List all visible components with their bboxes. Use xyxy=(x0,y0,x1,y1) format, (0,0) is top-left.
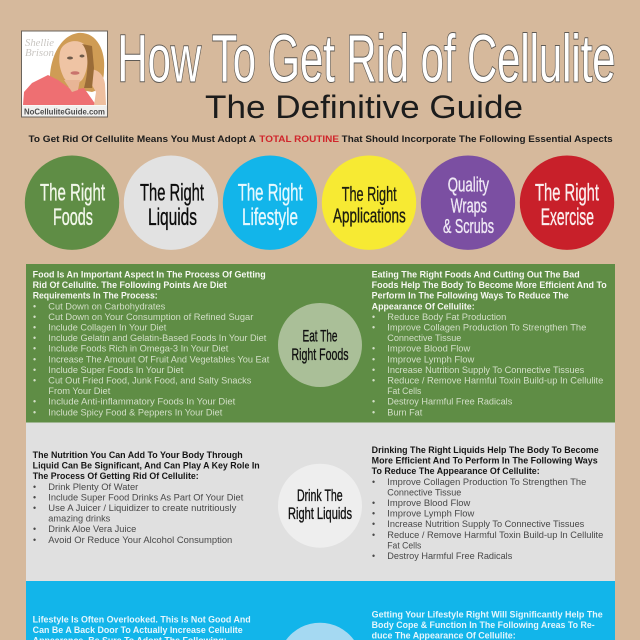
panel: the right lifestyle xyxy=(26,581,615,640)
left text: diet requirements: • xyxy=(33,365,36,375)
right text: food benefits: Connective Tissue xyxy=(387,333,461,343)
left text: diet requirements: Rid Of Cellulite. The Following Points Are Diet xyxy=(33,280,227,290)
badge: eat the right foods xyxy=(278,303,362,387)
circle: the right exercise: The Right xyxy=(535,180,599,207)
right text: liquid benefits: • xyxy=(372,519,375,529)
right text: liquid benefits: • xyxy=(372,477,375,487)
left text: liquid nutrition: The Nutrition You Can Add To Your Body Through xyxy=(33,450,243,460)
right text: food benefits: Eating The Right Foods And Cutting Out The Bad xyxy=(372,270,580,280)
circle: the right foods: The Right xyxy=(40,180,105,207)
left text: diet requirements: • xyxy=(33,407,36,417)
signature: Brison xyxy=(25,47,54,59)
right text: food benefits: Improve Lymph Flow xyxy=(387,354,475,364)
circle: the right lifestyle: Lifestyle xyxy=(242,204,298,231)
left text: diet requirements: Requirements In The Process: xyxy=(33,291,158,301)
badge: eat the right foods: Right Foods xyxy=(292,346,348,364)
right text: food benefits: • xyxy=(372,312,375,322)
left text: liquid nutrition: • xyxy=(33,524,36,534)
left text: diet requirements: Increase The Amount Of Fruit And Vegetables You Eat xyxy=(48,354,270,364)
signature xyxy=(25,37,54,59)
left text: diet requirements: Food Is An Important Aspect In The Process Of Getting xyxy=(33,270,266,280)
right text: food benefits: Fat Cells xyxy=(387,386,422,396)
left text: diet requirements: Include Foods Rich in Omega-3 In Your Diet xyxy=(48,344,229,354)
right text: liquid benefits: Destroy Harmful Free Radicals xyxy=(387,551,513,561)
badge: lifestyle circle xyxy=(286,623,354,640)
right text: food benefits: Improve Blood Flow xyxy=(387,344,471,354)
right text: liquid benefits: Connective Tissue xyxy=(387,487,461,497)
right text: liquid benefits: More Efficient And To Perform In The Following Ways xyxy=(372,456,598,466)
circle: the right applications: Applications xyxy=(333,205,406,228)
left text: liquid nutrition: The Process Of Getting Rid Of Cellulite: xyxy=(33,471,199,481)
circle: the right liquids: Liquids xyxy=(148,204,197,231)
left text: diet requirements: Cut Down on Your Consumption of Refined Sugar xyxy=(48,312,253,322)
right text: food benefits: Perform In The Following Ways To Reduce The xyxy=(372,291,569,301)
left text: diet requirements: • xyxy=(33,322,36,332)
left text: diet requirements: Cut Out Fried Food, Junk Food, and Salty Snacks xyxy=(48,376,252,386)
right text: liquid benefits: Improve Collagen Production To Strengthen The xyxy=(387,477,586,487)
left text: diet requirements: From Your Diet xyxy=(48,386,111,396)
right text: lifestyle benefits: Getting Your Lifestyle Right Will Significantly Help The xyxy=(372,609,603,619)
right text: liquid benefits: • xyxy=(372,498,375,508)
left text: diet requirements: Include Spicy Food & Peppers In Your Diet xyxy=(48,407,223,417)
right text: liquid benefits: • xyxy=(372,530,375,540)
left text: diet requirements: • xyxy=(33,333,36,343)
right text: food benefits: • xyxy=(372,407,375,417)
circle: the right foods xyxy=(25,156,119,250)
circle: the right liquids xyxy=(124,156,218,250)
right text: food benefits: Reduce Body Fat Production xyxy=(387,312,506,322)
intro sentence xyxy=(28,134,613,145)
right text: liquid benefits: Fat Cells xyxy=(387,540,422,550)
site name: NoCelluliteGuide.com xyxy=(24,106,105,116)
intro sentence: TOTAL ROUTINE xyxy=(259,134,340,145)
left text: liquid nutrition xyxy=(33,450,260,545)
right text: liquid benefits: Improve Lymph Flow xyxy=(387,509,475,519)
circle: the right lifestyle xyxy=(223,156,317,250)
left text: diet requirements: Include Super Foods In Your Diet xyxy=(48,365,184,375)
photo: author portrait with site name xyxy=(22,31,108,117)
right text: liquid benefits: • xyxy=(372,551,375,561)
right text: food benefits: Appearance Of Cellulite: xyxy=(372,301,475,311)
right text: liquid benefits: Drinking The Right Liquids Help The Body To Become xyxy=(372,445,599,455)
right text: food benefits: • xyxy=(372,344,375,354)
badge: drink the right liquids: Drink The xyxy=(297,487,343,505)
left text: diet requirements: Include Collagen In Your Diet xyxy=(48,322,167,332)
circle: quality wraps and scrubs: Quality xyxy=(448,174,489,197)
left text: diet requirements: • xyxy=(33,354,36,364)
right text: liquid benefits: Improve Blood Flow xyxy=(387,498,471,508)
left text: diet requirements: • xyxy=(33,301,36,311)
right text: food benefits: • xyxy=(372,354,375,364)
left text: lifestyle intro xyxy=(33,614,251,640)
circle: the right liquids: The Right xyxy=(140,180,204,207)
circle: quality wraps and scrubs xyxy=(421,156,515,250)
circle: quality wraps and scrubs: Wraps xyxy=(451,195,487,218)
right text: food benefits: • xyxy=(372,322,375,332)
subtitle: The Definitive Guide xyxy=(205,89,523,125)
right text: liquid benefits: Reduce / Remove Harmful Toxin Build-up In Cellulite xyxy=(387,530,603,540)
right text: food benefits: Burn Fat xyxy=(387,407,423,417)
left text: diet requirements: • xyxy=(33,376,36,386)
left text: liquid nutrition: Liquid Can Be Significant, And Can Play A Key Role In xyxy=(33,461,260,471)
signature: Shellie xyxy=(25,37,54,49)
left text: liquid nutrition: • xyxy=(33,492,36,502)
panel: drink the right liquids xyxy=(26,422,615,581)
left text: liquid nutrition: • xyxy=(33,482,36,492)
right text: liquid benefits: To Reduce The Appearance Of Cellulite: xyxy=(372,466,540,476)
left text: diet requirements: • xyxy=(33,312,36,322)
left text: lifestyle intro: Lifestyle Is Often Overlooked. This Is Not Good And xyxy=(33,614,251,624)
circle: the right foods: Foods xyxy=(53,204,93,231)
intro sentence: That Should Incorporate The Following Essential Aspects xyxy=(342,134,613,145)
circle: quality wraps and scrubs: & Scrubs xyxy=(443,215,494,238)
left text: diet requirements: • xyxy=(33,344,36,354)
left text: liquid nutrition: Avoid Or Reduce Your Alcohol Consumption xyxy=(48,535,232,545)
left text: liquid nutrition: Drink Aloe Vera Juice xyxy=(48,524,136,534)
right text: lifestyle benefits xyxy=(372,609,603,640)
right text: food benefits: • xyxy=(372,376,375,386)
left text: liquid nutrition: • xyxy=(33,503,36,513)
right text: lifestyle benefits: Body Cope & Function In The Following Areas To Re- xyxy=(372,620,595,630)
left text: liquid nutrition: • xyxy=(33,535,36,545)
left text: liquid nutrition: Include Super Food Drinks As Part Of Your Diet xyxy=(48,492,244,502)
left text: liquid nutrition: Use A Juicer / Liquidizer to create nutritiously xyxy=(48,503,237,513)
left text: lifestyle intro: Can Be A Back Door To Actually Increase Cellulite xyxy=(33,625,243,635)
badge: drink the right liquids: Right Liquids xyxy=(288,505,352,523)
right text: food benefits: • xyxy=(372,397,375,407)
intro sentence: To Get Rid Of Cellulite Means You Must Adopt A xyxy=(28,134,256,145)
left text: diet requirements: Include Anti-inflammatory Foods In Your Diet xyxy=(48,397,236,407)
left text: diet requirements: • xyxy=(33,397,36,407)
right text: food benefits: • xyxy=(372,365,375,375)
right text: food benefits xyxy=(372,270,607,417)
badge: drink the right liquids xyxy=(278,464,362,548)
left text: diet requirements: Include Gelatin and Gelatin-Based Foods In Your Diet xyxy=(48,333,267,343)
left text: diet requirements xyxy=(33,270,270,417)
circle: the right exercise: Exercise xyxy=(541,204,594,231)
badge: eat the right foods: Eat The xyxy=(302,328,338,346)
circle: the right applications xyxy=(322,156,416,250)
right text: food benefits: Reduce / Remove Harmful Toxin Build-up In Cellulite xyxy=(387,376,603,386)
right text: food benefits: Foods Help The Body To Become More Efficient And To xyxy=(372,280,607,290)
right text: liquid benefits xyxy=(372,445,603,561)
left text: liquid nutrition: Drink Plenty Of Water xyxy=(48,482,138,492)
circle: the right exercise xyxy=(520,156,614,250)
right text: food benefits: Improve Collagen Production To Strengthen The xyxy=(387,322,586,332)
left text: liquid nutrition: amazing drinks xyxy=(48,514,111,524)
right text: liquid benefits: • xyxy=(372,509,375,519)
right text: food benefits: Destroy Harmful Free Radicals xyxy=(387,397,513,407)
circle: the right applications: The Right xyxy=(342,183,397,206)
panel: eat the right foods xyxy=(26,264,615,422)
circle: the right lifestyle: The Right xyxy=(238,180,303,207)
left text: diet requirements: Cut Down on Carbohydrates xyxy=(48,301,166,311)
right text: food benefits: Increase Nutrition Supply To Connective Tissues xyxy=(387,365,585,375)
right text: liquid benefits: Increase Nutrition Supply To Connective Tissues xyxy=(387,519,585,529)
